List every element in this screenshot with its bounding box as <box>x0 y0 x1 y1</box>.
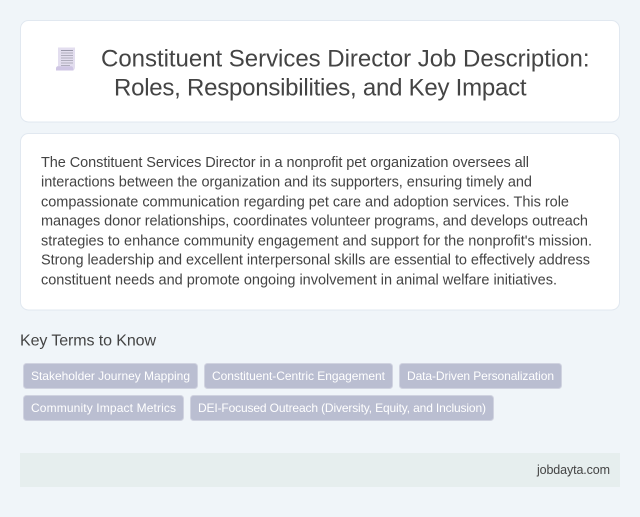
panel: title card <box>20 20 620 122</box>
heading: title: Constituent Services Director Job Description: <box>101 46 590 72</box>
tag: constituent-centric engagement: Constituent-Centric Engagement <box>212 369 386 383</box>
text block: description: strategies to enhance community engagement and support for the nonprofit's mission. <box>41 234 592 250</box>
tag: community impact metrics: Community Impact Metrics <box>31 401 176 415</box>
tag: dei-focused outreach: DEI-Focused Outreach (Diversity, Equity, and Inclusion) <box>198 401 486 415</box>
heading: title: Roles, Responsibilities, and Key Impact <box>114 74 527 102</box>
tag: community impact metrics <box>24 396 184 420</box>
panel: description card <box>20 134 620 310</box>
tag: data-driven personalization: Data-Driven Personalization <box>407 369 554 383</box>
tag: data-driven personalization <box>400 364 562 388</box>
text block: description: manages donor relationships, coordinates volunteer programs, and develops outreach <box>41 214 588 230</box>
text block: description: compassionate communication regarding pet care and adoption services. This role <box>41 194 569 210</box>
tag: stakeholder journey mapping: Stakeholder Journey Mapping <box>31 369 190 383</box>
heading: title <box>101 46 590 102</box>
icon: document scroll <box>56 48 75 70</box>
footer credit: jobdayta.com <box>536 463 610 477</box>
heading: key terms: Key Terms to Know <box>20 332 156 350</box>
text block: description: constituent needs and promote ongoing involvement in animal welfare initiatives. <box>41 272 557 288</box>
tag: constituent-centric engagement <box>204 364 392 388</box>
footer bar <box>20 453 620 487</box>
text block: description: The Constituent Services Director in a nonprofit pet organization oversees all <box>41 155 529 171</box>
tag: stakeholder journey mapping <box>24 364 198 388</box>
text block: description <box>41 155 592 288</box>
tag: dei-focused outreach <box>190 396 494 420</box>
text block: description: interactions between the organization and its supporters, ensuring timely and <box>41 174 532 190</box>
text block: description: Strong leadership and excellent interpersonal skills are essential to effectively address <box>41 252 590 268</box>
